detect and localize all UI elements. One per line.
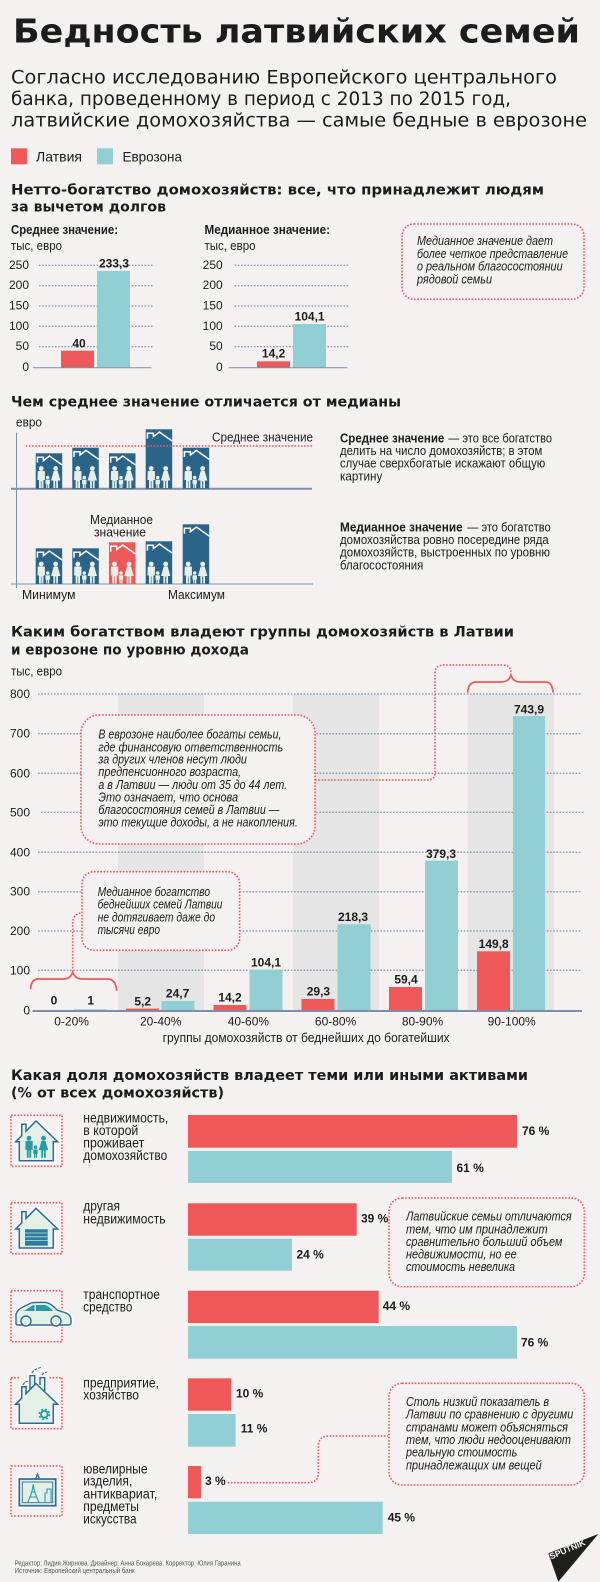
heading: asset ownership: [11, 1068, 528, 1102]
bar chart: median: 50: [209, 339, 223, 353]
heading: wealth by income group: и еврозоне по уровню дохода: [11, 642, 249, 658]
bar chart: wealth by income group: 800: [10, 687, 30, 701]
bar chart: wealth by income group: 200: [10, 924, 30, 938]
bar chart: wealth by income group: 218,3: [338, 910, 368, 924]
bar chart: mean: 250: [9, 258, 29, 272]
bar chart: median: 14,2: [262, 346, 286, 360]
subtitle: латвийские домохозяйства — самые бедные в еврозоне: [11, 110, 587, 132]
bar chart: wealth by income group: 40-60%: [228, 1014, 269, 1028]
diagram: mean vs median households: Медианное: [90, 512, 153, 527]
callout: median note: рядовой семьи: [416, 272, 492, 286]
bar chart: median: 250: [203, 258, 223, 272]
row labels: недвижимость: [83, 1211, 166, 1226]
row labels: транспортное: [83, 1287, 160, 1302]
bar chart: asset shares: 45 %: [388, 1511, 415, 1525]
bar chart: wealth by income group: 379,3: [426, 847, 456, 861]
callout: eurozone families: [81, 715, 315, 844]
legend: Латвия: [36, 148, 82, 164]
row labels: домохозяйство: [83, 1148, 167, 1163]
bar chart: wealth by income group: 104,1: [251, 955, 281, 969]
heading: net wealth: [11, 182, 544, 216]
callout: poorest families: Медианное богатство: [98, 885, 210, 899]
callout: median note: Медианное значение дает: [417, 234, 553, 248]
bar chart: asset shares: 61 %: [456, 1161, 484, 1175]
bar chart: asset shares: 76 %: [521, 1336, 549, 1350]
callout: valuables: [389, 1383, 584, 1485]
diagram: mean vs median households: [11, 415, 313, 602]
connector: top decile callout: [315, 665, 511, 780]
callout: median note: более четкое представление: [417, 247, 568, 261]
row labels: недвижимость,: [83, 1111, 168, 1126]
legend: Еврозона: [122, 148, 182, 164]
bar chart: median: [203, 222, 349, 374]
callout: latvian property: сравнительно больший объем: [406, 1235, 563, 1249]
callout: valuables: реальную стоимость: [405, 1446, 517, 1460]
bar chart: wealth by income group: 24,7: [166, 987, 190, 1001]
subtitle: Согласно исследованию Европейского центрального: [11, 66, 557, 88]
row labels: предметы: [83, 1499, 139, 1514]
row labels: искусства: [83, 1512, 137, 1527]
bar chart: median: 150: [203, 298, 223, 312]
row labels: хозяйство: [83, 1387, 139, 1402]
bar chart: mean: 0: [22, 360, 29, 374]
heading: net wealth: Нетто-богатство домохозяйств: все, что принадлежит людям: [11, 182, 544, 198]
heading: wealth by income group: [11, 625, 514, 658]
heading: asset ownership: (% от всех домохозяйств): [11, 1086, 224, 1102]
diagram: mean vs median households: Среднее значение: [212, 430, 313, 445]
bar chart: asset shares: 3 %: [205, 1474, 226, 1488]
row labels: другая: [83, 1199, 120, 1214]
connector: poorest callout: [73, 913, 82, 972]
row labels: изделия,: [83, 1474, 132, 1489]
footer credits: Редактор: Лидия Жирнова. Дизайнер: Анна Бокарева. Корректор: Юлия Гаранина: [15, 1560, 241, 1568]
bar chart: wealth by income group: 29,3: [307, 984, 330, 998]
text: median definition: домохозяйств, выстроенных по уровню: [340, 545, 550, 560]
bar chart: wealth by income group: 300: [10, 885, 30, 899]
bar chart: wealth by income group: 0: [23, 1004, 30, 1018]
row labels: в которой: [83, 1123, 138, 1138]
bar chart: asset shares: 76 %: [522, 1124, 550, 1138]
bar chart: mean: 200: [9, 278, 29, 292]
bar chart: wealth by income group: 500: [10, 805, 30, 819]
diagram: mean vs median households: евро: [16, 415, 42, 430]
callout: latvian property: недвижимости, но ее: [406, 1247, 517, 1261]
bracket: top decile: [468, 675, 553, 693]
heading: asset ownership: Какая доля домохозяйств владеет теми или иными активами: [11, 1068, 528, 1084]
text: median definition: [340, 519, 551, 572]
callout: latvian property: стоимость невелика: [406, 1260, 515, 1274]
text: mean definition: [340, 430, 552, 483]
bar chart: wealth by income group: 60-80%: [315, 1014, 357, 1028]
heading: wealth by income group: Каким богатством владеют группы домохозяйств в Латвии: [11, 625, 514, 641]
bar chart: wealth by income group: 1: [87, 993, 94, 1007]
bar chart: wealth by income group: 743,9: [514, 702, 544, 716]
callout: eurozone families: благосостояния семей в Латвии —: [98, 803, 280, 817]
icon: enterprise: [11, 1368, 62, 1429]
bar chart: wealth by income group: 0: [51, 993, 58, 1007]
text: median definition: — это богатство: [467, 519, 551, 534]
bar chart: mean: тыс, евро: [11, 238, 62, 253]
bar chart: wealth by income group: 100: [10, 963, 30, 977]
text: median definition: Медианное значение: [340, 519, 463, 534]
callout: eurozone families: предпенсионного возраста,: [98, 765, 241, 779]
bracket: poorest quintile: [31, 972, 117, 991]
diagram: mean vs median households: Минимум: [22, 587, 76, 602]
callout: latvian property: Латвийские семьи отличаются: [405, 1210, 572, 1224]
bar chart: wealth by income group: 90-100%: [488, 1014, 536, 1028]
text: median definition: благосостояния: [340, 557, 423, 572]
callout: valuables: тем, что люди недооценивают: [406, 1433, 571, 1447]
callout: poorest families: [82, 872, 240, 950]
subtitle: банка, проведенному в период с 2013 по 2015 год,: [11, 88, 511, 110]
bar chart: median: Медианное значение:: [204, 222, 330, 237]
bar chart: wealth by income group: 14,2: [218, 991, 242, 1005]
connector: valuables callout: [228, 1436, 388, 1483]
callout: poorest families: беднейших семей Латвии: [98, 898, 222, 912]
icon: other property: [11, 1203, 62, 1254]
footer credits: [15, 1560, 241, 1575]
bar chart: wealth by income group: [10, 663, 585, 1045]
text: mean definition: делить на число домохозяйств; в этом: [340, 443, 542, 458]
bar chart: mean: 50: [16, 339, 29, 353]
text: median definition: домохозяйства ровно посередине ряда: [340, 532, 549, 547]
callout: valuables: Латвии по сравнению с другими: [405, 1408, 573, 1422]
callout: latvian property: тем, что им принадлежит: [406, 1222, 548, 1236]
row labels: средство: [83, 1300, 132, 1315]
icon: painting: [11, 1466, 62, 1516]
bar chart: wealth by income group: тыс, евро: [11, 663, 62, 678]
bar chart: mean: 233,3: [99, 257, 129, 271]
bar chart: mean: 100: [9, 319, 29, 333]
bar chart: mean: 150: [9, 298, 29, 312]
bar chart: wealth by income group: 59,4: [394, 973, 418, 987]
text: mean definition: картину: [340, 468, 383, 483]
bar chart: asset shares: 39 %: [361, 1212, 389, 1226]
callout: latvian property: [389, 1198, 584, 1287]
row labels: антиквариат,: [83, 1487, 157, 1502]
icon: family home: [11, 1115, 62, 1166]
callout: eurozone families: В еврозоне наиболее богаты семьи,: [98, 727, 281, 741]
bar chart: mean: Среднее значение:: [11, 222, 118, 237]
bar chart: wealth by income group: 0-20%: [54, 1014, 89, 1028]
row labels: проживает: [83, 1136, 144, 1151]
bar chart: median: тыс, евро: [204, 238, 256, 253]
legend: [11, 148, 182, 164]
callout: eurozone families: за других членов несут люди: [98, 753, 247, 767]
bar chart: asset shares: 10 %: [236, 1386, 264, 1400]
bar chart: median: 0: [216, 360, 223, 374]
heading: net wealth: за вычетом долгов: [11, 200, 166, 216]
bar chart: mean: 40: [72, 336, 86, 350]
bar chart: median: 200: [203, 278, 223, 292]
callout: poorest families: не дотягивает даже до: [98, 910, 215, 924]
bar chart: wealth by income group: 600: [10, 766, 30, 780]
callout: eurozone families: где финансовую ответственность: [98, 740, 283, 754]
bar chart: asset shares: [188, 1115, 550, 1534]
callout: median note: [402, 224, 584, 299]
bar chart: wealth by income group: 20-40%: [140, 1014, 182, 1028]
bar chart: median: 104,1: [295, 310, 325, 324]
footer credits: Источник: Европейский центральный банк: [15, 1567, 136, 1575]
text: mean definition: — это все богатство: [448, 430, 552, 445]
bar chart: wealth by income group: 700: [10, 727, 30, 741]
text: mean definition: случае сверхбогатые искажают общую: [340, 456, 546, 471]
callout: valuables: принадлежащих им вещей: [406, 1458, 542, 1472]
callout: valuables: странами может объясняться: [406, 1420, 568, 1434]
bar chart: wealth by income group: группы домохозяйств от беднейших до богатейших: [163, 1030, 450, 1045]
callout: eurozone families: а в Латвии — люди от 35 до 44 лет.: [98, 778, 287, 792]
bar chart: asset shares: 11 %: [241, 1422, 268, 1436]
title: Бедность латвийских семей: [13, 12, 580, 51]
bar chart: asset shares: 24 %: [296, 1247, 324, 1261]
bar chart: wealth by income group: 5,2: [134, 994, 151, 1008]
callout: median note: о реальном благосостоянии: [417, 260, 563, 274]
callout: eurozone families: Это означает, что основа: [98, 791, 238, 805]
logo: Sputnik: SPUTNIK: [548, 1537, 588, 1561]
callout: poorest families: тысячи евро: [98, 923, 160, 937]
bar chart: mean: [9, 222, 153, 374]
bar chart: asset shares: 44 %: [383, 1299, 410, 1313]
diagram: mean vs median households: Максимум: [168, 587, 225, 602]
row labels: предприятие,: [83, 1375, 159, 1390]
callout: valuables: Столь низкий показатель в: [406, 1395, 549, 1409]
row labels: ювелирные: [83, 1461, 148, 1476]
bar chart: wealth by income group: 80-90%: [402, 1014, 444, 1028]
bar chart: wealth by income group: 149,8: [479, 937, 509, 951]
bar chart: wealth by income group: 400: [10, 845, 30, 859]
heading: mean vs median: Чем среднее значение отличается от медианы: [11, 395, 401, 411]
callout: eurozone families: это текущие доходы, а не накопления.: [98, 816, 298, 830]
text: mean definition: Среднее значение: [340, 430, 444, 445]
row labels: [83, 1111, 168, 1527]
icon: car: [11, 1291, 71, 1342]
subtitle: [11, 66, 587, 132]
diagram: mean vs median households: значение: [94, 525, 146, 540]
logo: Sputnik: [548, 1534, 598, 1582]
bar chart: median: 100: [203, 319, 223, 333]
